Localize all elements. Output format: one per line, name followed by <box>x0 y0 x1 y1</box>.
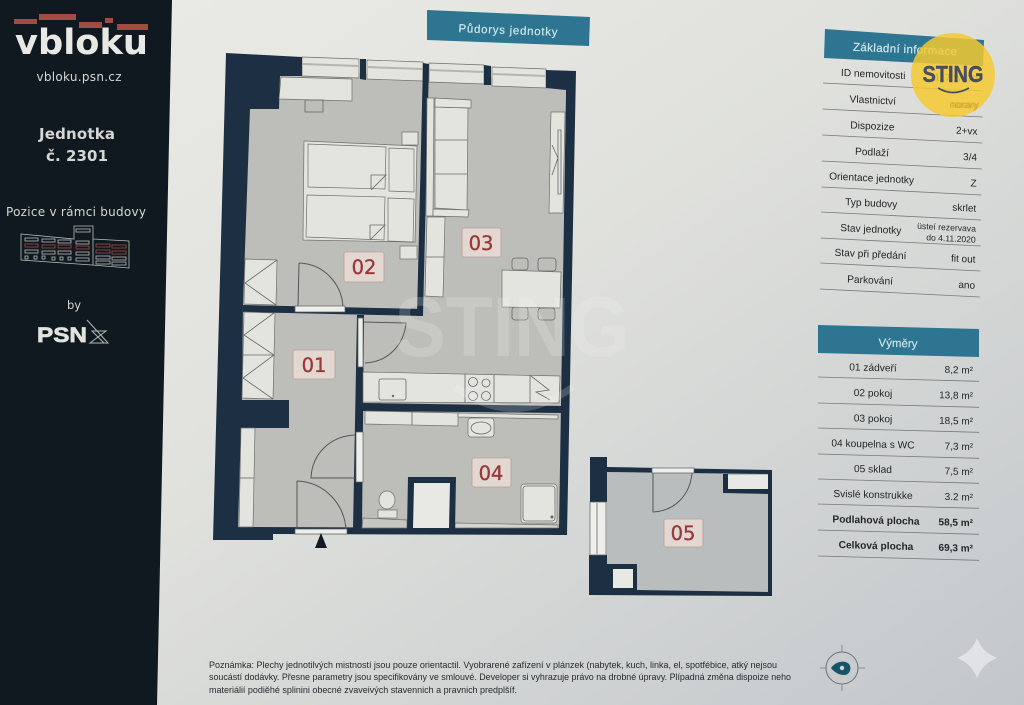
table rows: skrlet <box>952 203 977 215</box>
logo: vbloku: vbloku <box>15 23 148 63</box>
badge: STING logo <box>911 33 995 117</box>
watermark: STING: STING <box>394 280 630 374</box>
table rows: 117/2/772 <box>934 73 979 86</box>
table rows: 01 zádveří <box>849 362 897 375</box>
table rows: Celková plocha <box>839 540 914 553</box>
website url: vbloku.psn.cz <box>36 70 122 84</box>
room label 03 <box>462 228 501 257</box>
table rows: 04 koupelna s WC <box>831 438 915 452</box>
windows <box>302 57 546 88</box>
table rows: do 4.11.2020 <box>926 232 976 245</box>
table rows: 7,5 m² <box>945 466 974 478</box>
room label 04: 04 <box>479 462 503 485</box>
entrance marker <box>315 533 327 548</box>
room label 04 <box>472 458 511 487</box>
table rows: 13,8 m² <box>939 390 974 402</box>
table rows: 3/4 <box>963 152 978 164</box>
room label 03: 03 <box>469 232 493 255</box>
unit heading <box>38 125 115 165</box>
table rows: 69,3 m² <box>939 543 974 555</box>
door: entrance <box>295 481 347 534</box>
room 02 furniture <box>244 77 418 305</box>
table rows: fit out <box>951 254 976 266</box>
logo: PSN <box>37 320 108 347</box>
room label 02 <box>344 252 384 282</box>
table rows: 58,5 m² <box>939 517 974 529</box>
table rows: norary <box>949 99 978 112</box>
walls <box>213 53 576 540</box>
table rows: Stav při předání <box>834 248 907 262</box>
badge: STING logo: norary <box>951 100 979 111</box>
table header: Základní informace <box>853 42 957 58</box>
by label: by <box>67 298 81 312</box>
footnote <box>209 659 791 695</box>
table rows: 18,5 m² <box>939 416 974 428</box>
table rows: 02 pokoj <box>854 388 892 400</box>
icon: sparkle <box>957 638 997 678</box>
door: bathroom <box>311 432 363 482</box>
table rows: Vlastnictví <box>849 94 896 108</box>
kitchen counter <box>363 372 560 403</box>
room 03 furniture <box>425 98 565 320</box>
watermark: STING <box>394 280 630 408</box>
table rows: ano <box>958 280 976 292</box>
door: room 05 <box>652 468 694 512</box>
panel: left sidebar <box>0 0 172 705</box>
icon: compass <box>820 645 865 691</box>
table rows: Dispozize <box>850 120 895 134</box>
room label 01: 01 <box>302 354 326 377</box>
table rows: Podlaží <box>855 147 889 159</box>
table rows: ID nemovitosti <box>841 68 905 82</box>
room label 01 <box>293 350 335 379</box>
table rows: 05 sklad <box>854 464 892 476</box>
heading: Půdorys jednotky: Půdorys jednotky <box>458 23 558 39</box>
table rows: 7,3 m² <box>945 441 974 453</box>
door: room 02 <box>295 263 345 312</box>
table rows: Stav jednotky <box>840 223 902 237</box>
table rows <box>818 361 979 560</box>
icon: building position <box>21 226 129 268</box>
room label 05 <box>664 519 703 547</box>
table rows: üsteí rezervava <box>917 221 976 234</box>
table: areas <box>818 325 979 560</box>
table header <box>818 325 979 357</box>
position heading: Pozice v rámci budovy <box>6 205 146 219</box>
table header <box>824 29 984 66</box>
table rows: 2+vx <box>956 126 977 138</box>
table rows <box>820 67 983 297</box>
footnote: materiálií podiěhé splinini obecné zvaveivých stavennich a pravnich predplšíf. <box>209 684 517 695</box>
footnote: Poznámka: Plechy jednotilvých mistností jsou pouze orientactil. Vyobrarené zafízení v plánzek (nabytek, kuch, linka, el, spotfébice, atký nejsou <box>209 659 777 670</box>
table rows: Typ budovy <box>845 197 898 211</box>
floor plan: apartment <box>213 53 576 548</box>
heading: Půdorys jednotky <box>427 10 590 46</box>
room label 02: 02 <box>352 256 376 279</box>
table rows: 3.2 m² <box>945 492 974 504</box>
room label 05: 05 <box>671 522 695 545</box>
logo: PSN: PSN <box>37 324 87 347</box>
table rows: Orientace jednotky <box>829 171 915 187</box>
door: corridor <box>358 318 406 367</box>
table rows: 03 pokoj <box>854 413 892 425</box>
bathroom fittings <box>362 411 558 530</box>
table rows: Podlahová plocha <box>832 514 920 528</box>
room 01 furniture <box>239 312 275 527</box>
unit heading: č. 2301 <box>46 147 108 165</box>
table header: Výměry <box>878 338 918 350</box>
table rows: Z <box>970 178 977 190</box>
floor plan: storage room 05 <box>589 457 772 596</box>
table: basic information <box>820 29 984 297</box>
table rows: 8,2 m² <box>945 365 974 377</box>
footnote: soucástí dodávky. Přesne parametry jsou specifikovány ve smlouvé. Developer si vyhrazuje právo na drobné úpravy. Plípadná změna dispoize neho <box>209 671 791 682</box>
table rows: Parkování <box>847 274 893 288</box>
unit heading: Jednotka <box>38 125 115 143</box>
table rows: Svislé konstrukke <box>833 489 913 502</box>
badge: STING logo: STING <box>922 61 984 87</box>
